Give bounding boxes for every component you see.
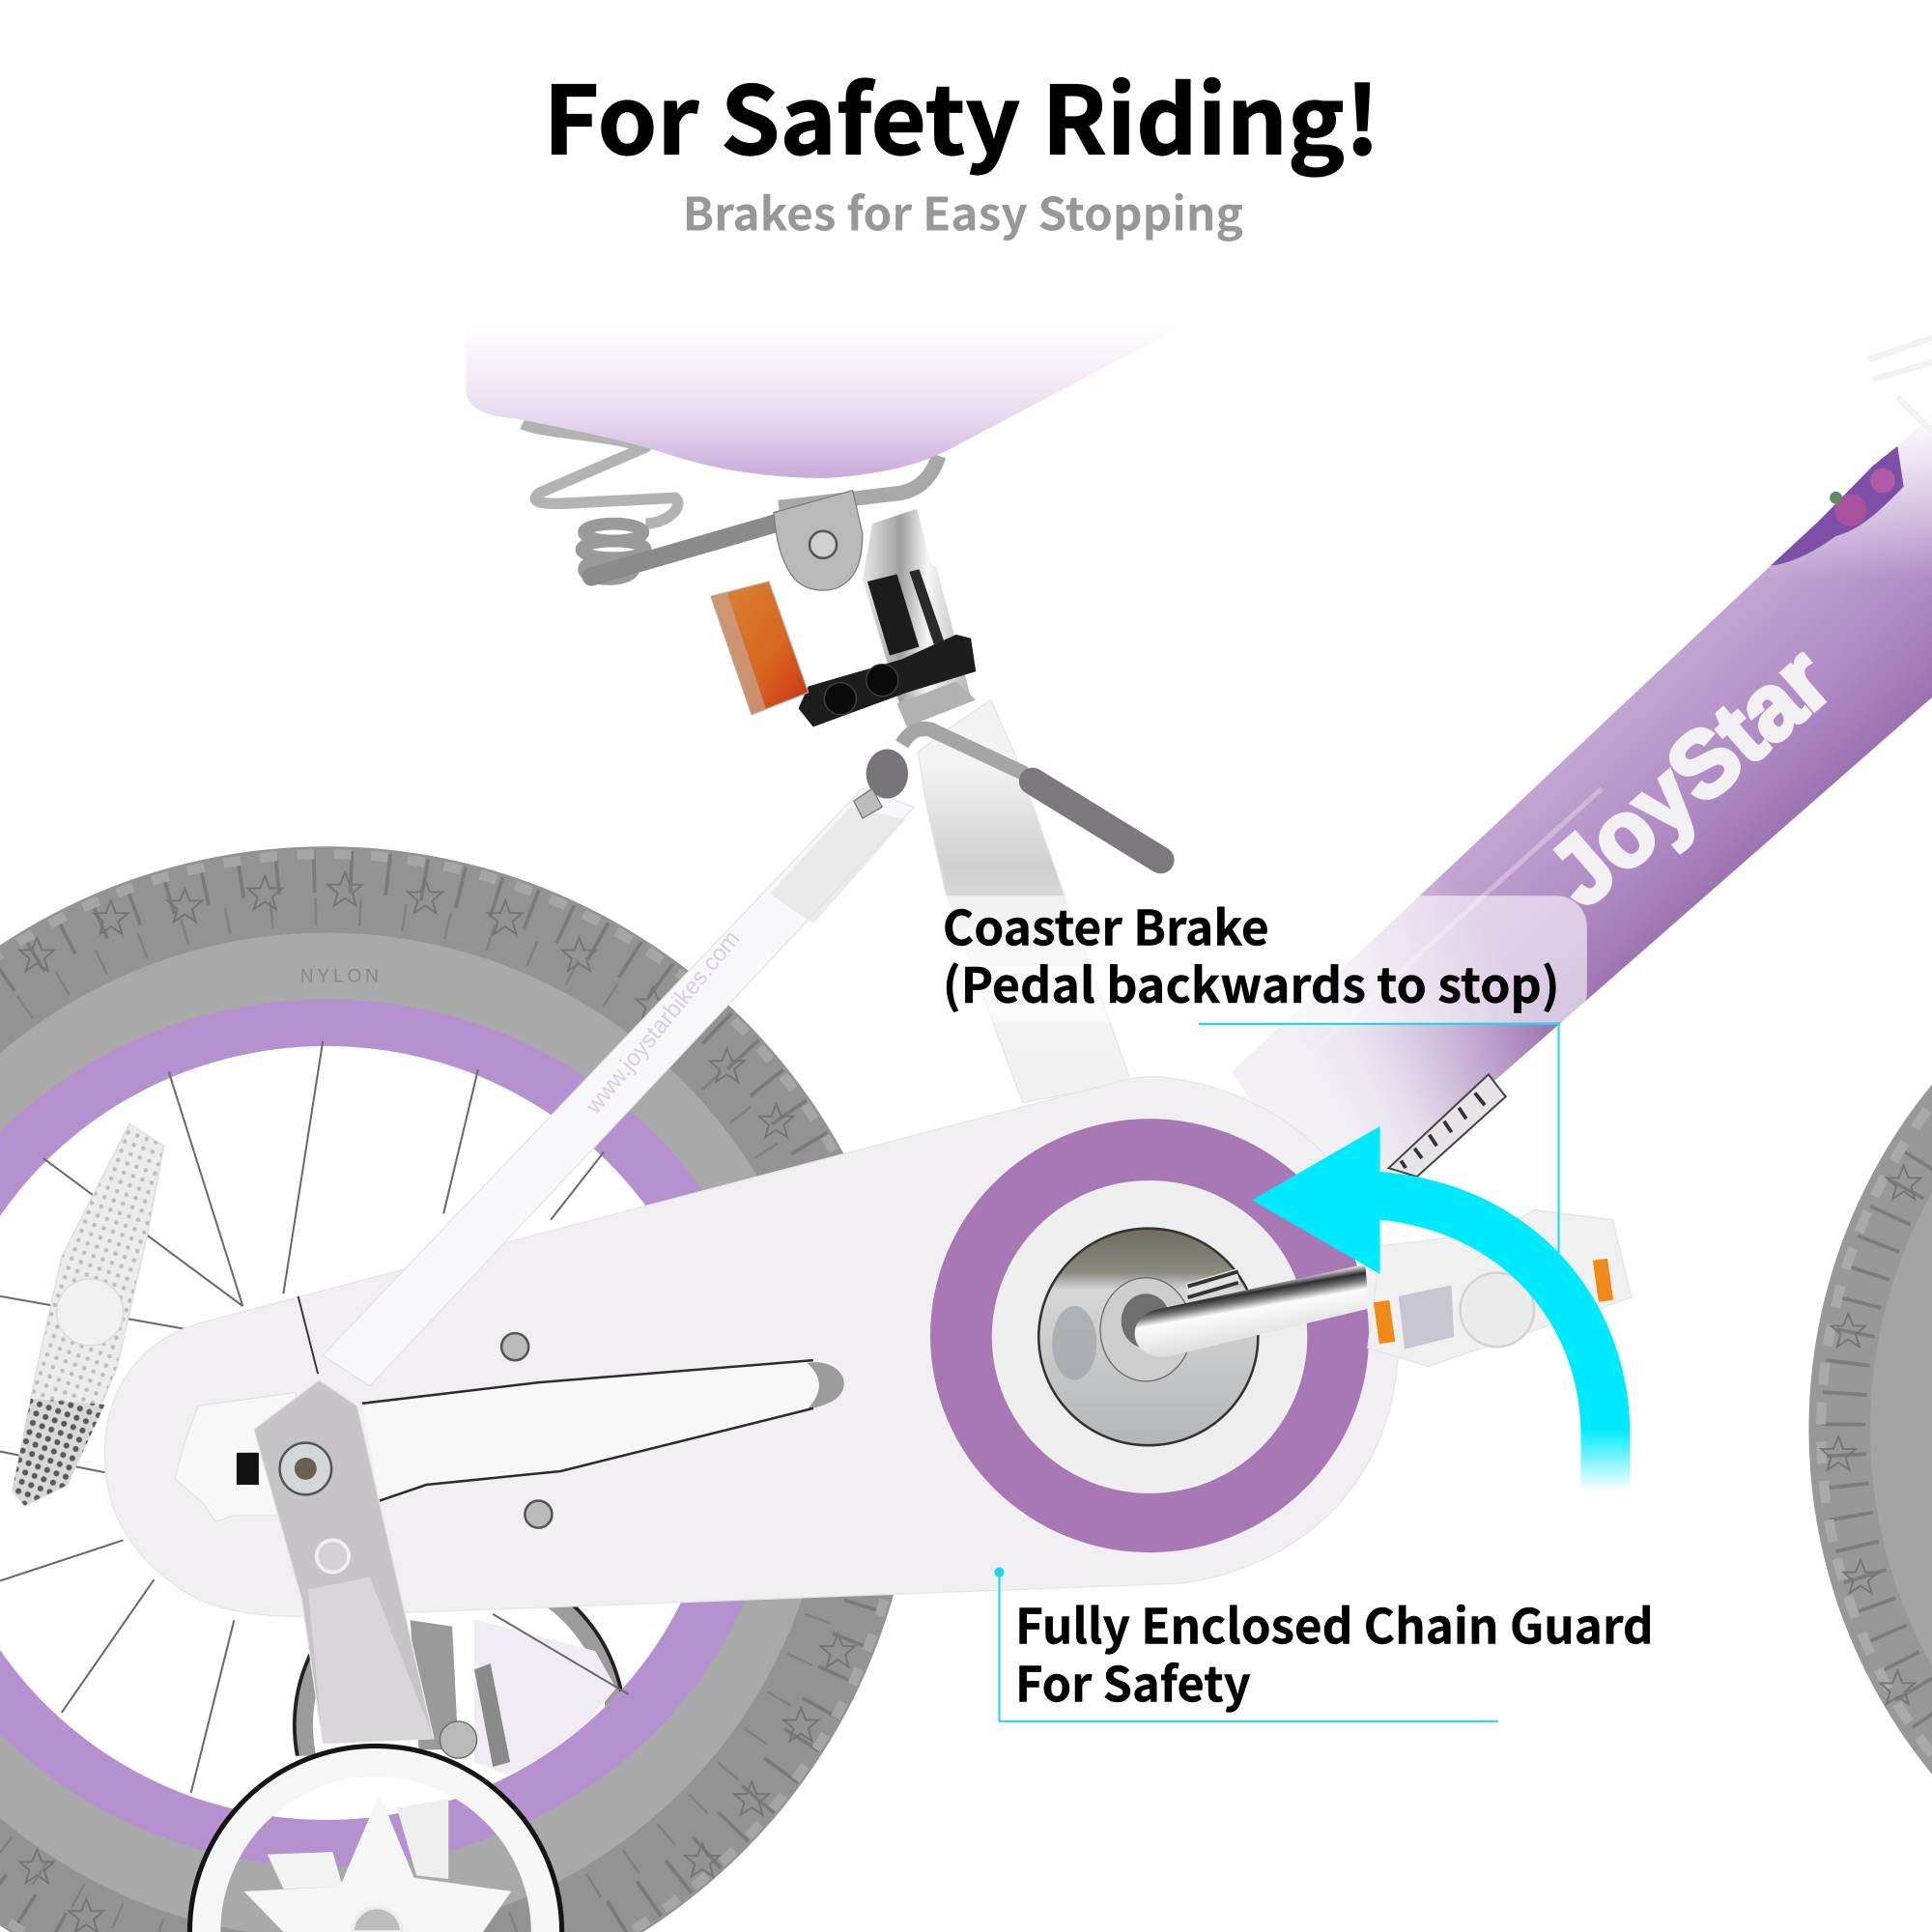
tube highlight <box>1306 788 1602 1057</box>
seat post <box>863 509 971 712</box>
front wheel partial <box>1808 1084 1932 1775</box>
rear hub behind guard <box>292 1606 622 1774</box>
seat stay <box>323 788 914 1386</box>
label: coaster brake: Coaster Brake <box>943 890 1269 959</box>
sprocket opening <box>1038 1229 1258 1445</box>
seat post assembly <box>523 424 1161 860</box>
axle nut <box>280 1443 331 1494</box>
chrome crank arm <box>1135 1264 1369 1357</box>
title: For Safety Riding! <box>543 45 1380 181</box>
spring coils <box>582 524 645 579</box>
tire tread <box>0 846 916 1932</box>
seat rails <box>591 523 779 577</box>
post knurl <box>897 681 976 727</box>
callout box: coaster brake <box>943 895 1587 1023</box>
spokes <box>0 1041 629 1793</box>
training wheel hub <box>353 1907 402 1932</box>
label: coaster brake: (Pedal backwards to stop) <box>943 948 1560 1017</box>
chainring axle <box>1188 1271 1238 1297</box>
label: chain guard: For Safety <box>1015 1646 1251 1716</box>
pedal crank and pedal <box>1100 1210 1632 1381</box>
head tube outline <box>1868 337 1932 431</box>
white ring <box>992 1180 1307 1493</box>
wheel opening <box>0 1046 721 1820</box>
rear wheel <box>0 846 916 1932</box>
black bracket <box>799 635 976 727</box>
arrow: pedal backwards <box>1252 1126 1631 1491</box>
rim <box>0 999 780 1866</box>
guard slot <box>362 1360 844 1501</box>
rear reflector <box>711 582 809 715</box>
quick release lever <box>854 728 1161 860</box>
label: chain guard: Fully Enclosed Chain Guard <box>1015 1589 1654 1659</box>
stay website text: www.joystarbikes.com <box>580 925 745 1120</box>
seat spring <box>523 424 678 524</box>
plate rivet <box>317 1540 349 1573</box>
crank washer <box>1100 1278 1191 1381</box>
training wheel star <box>244 1794 511 1932</box>
wheel reflector <box>13 1123 164 1506</box>
guard screws <box>501 1333 528 1360</box>
brand logo: JoyStar <box>1528 627 1850 926</box>
decal flower <box>1771 446 1904 565</box>
seat clamp <box>774 491 863 590</box>
saddle <box>466 323 1189 478</box>
leader line: coaster brake <box>1199 1024 1559 1257</box>
dropout plate and trainer arm <box>254 1380 434 1744</box>
tire stars <box>19 872 855 1932</box>
NYLON tire marking: NYLON <box>300 967 383 987</box>
subtitle: Brakes for Easy Stopping <box>683 178 1243 244</box>
leader line: chain guard <box>994 1567 1498 1721</box>
training wheel <box>189 1746 562 1932</box>
guard axle notch <box>175 1392 308 1521</box>
warning sticker <box>1389 1074 1506 1177</box>
seat tube <box>918 699 1131 1103</box>
tire sidewall <box>0 933 829 1932</box>
pedal body <box>1368 1210 1632 1367</box>
main frame tube <box>1233 337 1932 1182</box>
chain guard <box>104 1077 1399 1616</box>
purple ring <box>930 1119 1369 1552</box>
